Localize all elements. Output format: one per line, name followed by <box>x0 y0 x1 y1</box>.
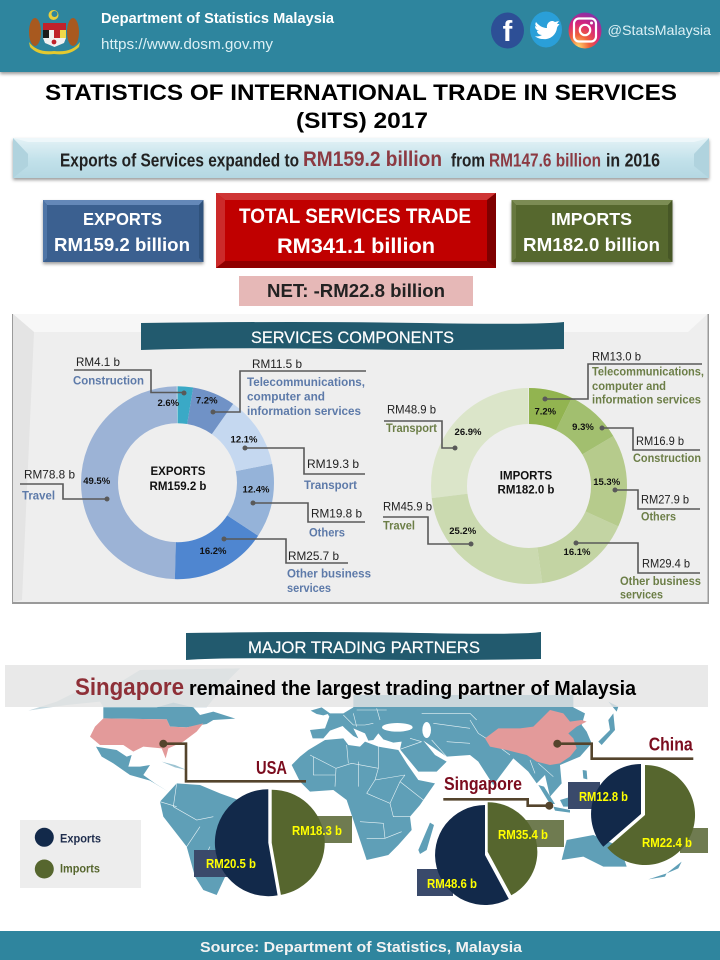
banner: exports expanded: from <box>451 150 485 170</box>
callout: exports construction: RM4.1 b <box>76 355 120 369</box>
chart: exports donut: RM159.2 b <box>150 481 206 493</box>
partner: Singapore: RM35.4 b <box>498 827 548 842</box>
map highlight: China <box>485 710 587 765</box>
title: (SITS) 2017 <box>296 108 428 133</box>
callout: exports others: RM19.8 b <box>311 507 362 521</box>
callout: imports transport: RM48.9 b <box>387 403 436 417</box>
callout: imports other business services <box>574 540 701 602</box>
legend <box>20 820 141 888</box>
callout: imports telecommunications: computer and <box>592 381 666 393</box>
callout: imports transport <box>384 403 458 450</box>
map highlight: USA <box>90 718 203 758</box>
map: Africa and Eurasia <box>292 695 592 860</box>
header bar <box>0 0 720 72</box>
legend: Exports <box>60 832 101 846</box>
partner: USA: RM20.5 b <box>206 856 256 871</box>
callout: imports other business services: services <box>620 590 663 602</box>
callout: exports travel: Travel <box>22 490 55 502</box>
callout: exports construction <box>73 355 186 396</box>
callout: imports telecommunications <box>542 350 704 406</box>
callout: imports travel <box>383 499 474 546</box>
icon: facebook <box>491 12 524 48</box>
chart: exports donut: 12.1% <box>231 435 258 446</box>
chart: imports donut: 25.2% <box>449 526 477 537</box>
heading: major trading partners: MAJOR TRADING PARTNERS <box>248 638 480 657</box>
callout: imports travel: Travel <box>383 520 415 532</box>
band: largest trading partner: Singapore <box>75 674 184 701</box>
box: exports total: RM159.2 billion <box>54 234 190 255</box>
callout: imports others <box>612 488 700 524</box>
footer source bar: Source: Department of Statistics, Malaysia <box>200 939 523 956</box>
callout: imports other business services: Other business <box>620 576 701 588</box>
box: exports total: EXPORTS <box>83 209 162 229</box>
partner: China: China <box>649 735 694 755</box>
map: Australia and New Zealand <box>562 835 682 879</box>
callout: exports transport: RM19.3 b <box>307 457 359 471</box>
callout: imports transport: Transport <box>386 423 437 435</box>
chart: exports donut <box>83 396 270 561</box>
banner: exports expanded: RM147.6 billion <box>489 150 601 170</box>
chart: imports donut: 7.2% <box>534 406 557 417</box>
chart: exports donut: 7.2% <box>196 396 218 407</box>
chart: imports donut: IMPORTS <box>500 470 553 482</box>
callout: exports travel <box>20 467 110 502</box>
partner: USA <box>159 740 352 896</box>
chart: imports donut: 16.1% <box>564 547 591 558</box>
map: Indonesia and Japan <box>538 702 618 813</box>
partner: China <box>553 735 708 865</box>
chart: imports donut: 15.3% <box>593 477 621 488</box>
box: imports total: RM182.0 billion <box>523 234 660 255</box>
banner: exports expanded: in 2016 <box>606 150 660 170</box>
legend: Imports <box>60 862 100 876</box>
chart: exports donut: EXPORTS <box>151 466 206 478</box>
callout: exports other business services: RM25.7 b <box>288 549 339 563</box>
box: imports total <box>512 200 672 262</box>
callout: imports travel: RM45.9 b <box>383 499 432 513</box>
box: exports total <box>43 200 204 262</box>
partner: Singapore: Singapore <box>444 774 522 794</box>
pie: China <box>591 764 695 865</box>
partner: Singapore <box>417 774 564 905</box>
callout: imports other business services: RM29.4 b <box>642 556 690 570</box>
website url: https://www.dosm.gov.my <box>101 36 273 53</box>
chart: imports donut: 26.9% <box>455 427 482 438</box>
pie: Singapore <box>435 802 537 905</box>
band: largest trading partner <box>5 665 708 707</box>
map: South America <box>160 783 257 895</box>
social handle: @StatsMalaysia <box>608 22 711 38</box>
chart: exports donut: 12.4% <box>243 485 270 496</box>
heading: services components: SERVICES COMPONENTS <box>251 328 454 347</box>
banner: exports expanded <box>13 138 709 178</box>
net balance <box>239 276 473 306</box>
callout: exports transport: Transport <box>304 480 357 492</box>
partner: USA: USA <box>256 758 287 778</box>
world map <box>28 668 682 895</box>
callout: imports construction: RM16.9 b <box>636 434 684 448</box>
icon: twitter <box>530 12 562 48</box>
map: arctic and Canada <box>28 668 240 727</box>
chart: imports donut: 9.3% <box>572 422 594 433</box>
callout: exports other business services <box>222 536 371 595</box>
callout: exports telecommunications: computer and <box>247 392 325 404</box>
callout: exports others: Others <box>309 528 345 540</box>
callout: exports others <box>250 500 365 540</box>
callout: imports construction: Construction <box>633 453 701 465</box>
heading: major trading partners <box>186 632 541 660</box>
pie: USA <box>215 789 325 896</box>
callout: exports transport <box>242 446 365 492</box>
heading: services components <box>141 322 564 350</box>
partner: USA: RM18.3 b <box>292 823 342 838</box>
department name: Department of Statistics Malaysia <box>101 10 335 27</box>
panel: services components <box>12 314 709 604</box>
title: STATISTICS OF INTERNATIONAL TRADE IN SERVICES <box>45 80 677 105</box>
callout: imports construction <box>600 426 701 465</box>
callout: exports construction: Construction <box>73 376 144 388</box>
callout: imports others: RM27.9 b <box>641 493 689 507</box>
icon: Malaysia coat of arms <box>29 10 80 54</box>
box: total services trade <box>216 193 496 268</box>
icon: instagram <box>568 12 602 48</box>
callout: exports telecommunications: Telecommunications, <box>247 377 365 389</box>
callout: exports other business services: Other business <box>287 568 371 580</box>
box: total services trade: TOTAL SERVICES TRADE <box>239 204 471 228</box>
callout: exports travel: RM78.8 b <box>24 467 75 481</box>
partner: China: RM22.4 b <box>642 835 692 850</box>
box: imports total: IMPORTS <box>551 209 632 229</box>
footer source bar <box>0 931 720 960</box>
banner: exports expanded: RM159.2 billion <box>303 148 442 171</box>
chart: imports donut <box>449 406 621 566</box>
callout: imports telecommunications: RM13.0 b <box>592 350 641 364</box>
chart: imports donut: RM182.0 b <box>498 484 554 496</box>
callout: exports telecommunications: RM11.5 b <box>252 357 302 371</box>
callout: exports other business services: services <box>287 583 331 595</box>
callout: imports telecommunications: Telecommunications, <box>592 367 704 379</box>
chart: exports donut: 16.2% <box>200 546 227 557</box>
callout: imports telecommunications: information services <box>592 394 701 406</box>
banner: exports expanded: Exports of Services expanded to <box>60 150 299 170</box>
box: total services trade: RM341.1 billion <box>277 234 435 258</box>
partner: China: RM12.8 b <box>579 789 628 804</box>
icon: facebook: f <box>503 16 513 48</box>
partner: Singapore: RM48.6 b <box>427 876 477 891</box>
net balance: NET: -RM22.8 billion <box>267 281 445 301</box>
map: Mexico and Central America <box>96 747 187 792</box>
chart: exports donut: 2.6% <box>157 398 180 409</box>
callout: exports telecommunications: information services <box>247 406 361 418</box>
callout: imports others: Others <box>641 512 676 524</box>
band: largest trading partner: remained the largest trading partner of Malaysia <box>189 678 637 700</box>
callout: exports telecommunications <box>210 357 366 418</box>
title <box>45 80 677 133</box>
chart: exports donut: 49.5% <box>83 476 111 487</box>
